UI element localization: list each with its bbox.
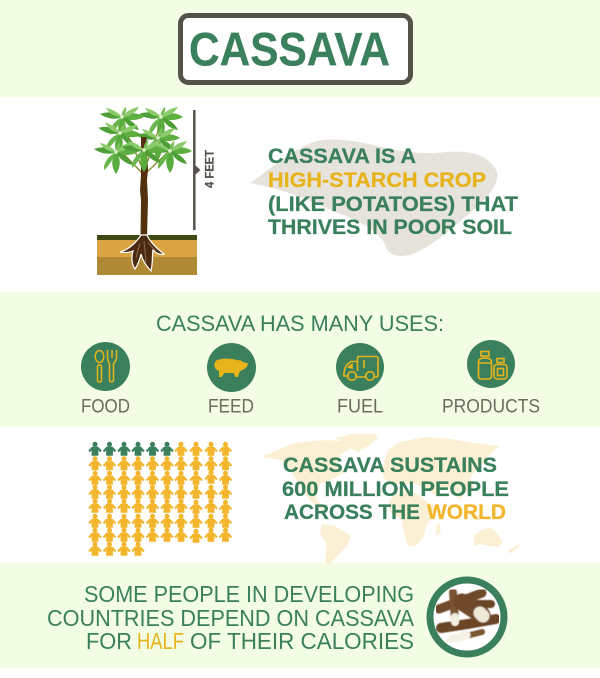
background shape: cassava root	[250, 139, 497, 256]
background: world map	[262, 434, 520, 564]
text: high-starch crop	[268, 145, 518, 239]
illustration: cassava plant with height marker: 4 FEET	[204, 150, 216, 188]
label: food: FOOD	[81, 396, 130, 418]
icon: food	[81, 342, 130, 391]
band: uses background	[0, 292, 600, 427]
label: products: PRODUCTS	[442, 396, 540, 418]
pictogram: people	[88, 442, 232, 556]
text: high-starch crop: (LIKE POTATOES) THAT	[268, 193, 518, 216]
label: fuel: FUEL	[337, 396, 383, 418]
text: half of calories: OF THEIR CALORIES	[190, 628, 414, 654]
text: half of calories: FOR	[86, 628, 132, 654]
icon: products	[467, 340, 515, 388]
label: feed: FEED	[208, 396, 254, 418]
text: half of calories: COUNTRIES DEPEND ON CASSAVA	[47, 605, 415, 631]
band: title background	[0, 0, 600, 97]
trunk	[140, 137, 148, 237]
branches	[120, 122, 170, 175]
text: high-starch crop: CASSAVA IS A	[268, 145, 416, 168]
text: half of calories: HALF	[137, 628, 184, 654]
soil layers	[97, 235, 197, 275]
text: sustains people: WORLD	[427, 501, 506, 524]
roots	[120, 235, 164, 271]
height marker	[193, 110, 196, 230]
text: high-starch crop: HIGH-STARCH CROP	[268, 169, 486, 192]
text: high-starch crop: THRIVES IN POOR SOIL	[268, 216, 512, 239]
text: sustains people: CASSAVA SUSTAINS	[283, 454, 497, 477]
text: sustains people: 600 MILLION PEOPLE	[282, 478, 509, 501]
title: CASSAVA	[189, 22, 390, 76]
illustration: cassava plant with height marker	[94, 107, 216, 275]
text: sustains people: ACROSS THE	[284, 501, 420, 524]
text: half of calories: SOME PEOPLE IN DEVELOPING	[84, 581, 414, 607]
text: half of calories	[47, 581, 415, 654]
image: cassava roots in ring	[430, 580, 504, 654]
center leaf cluster	[122, 140, 166, 172]
text: sustains people	[282, 454, 509, 524]
heading: uses: CASSAVA HAS MANY USES:	[156, 311, 444, 336]
band: calories background	[0, 563, 600, 668]
icon: fuel	[336, 343, 384, 391]
icon: feed	[207, 343, 256, 392]
leaves	[94, 107, 192, 174]
